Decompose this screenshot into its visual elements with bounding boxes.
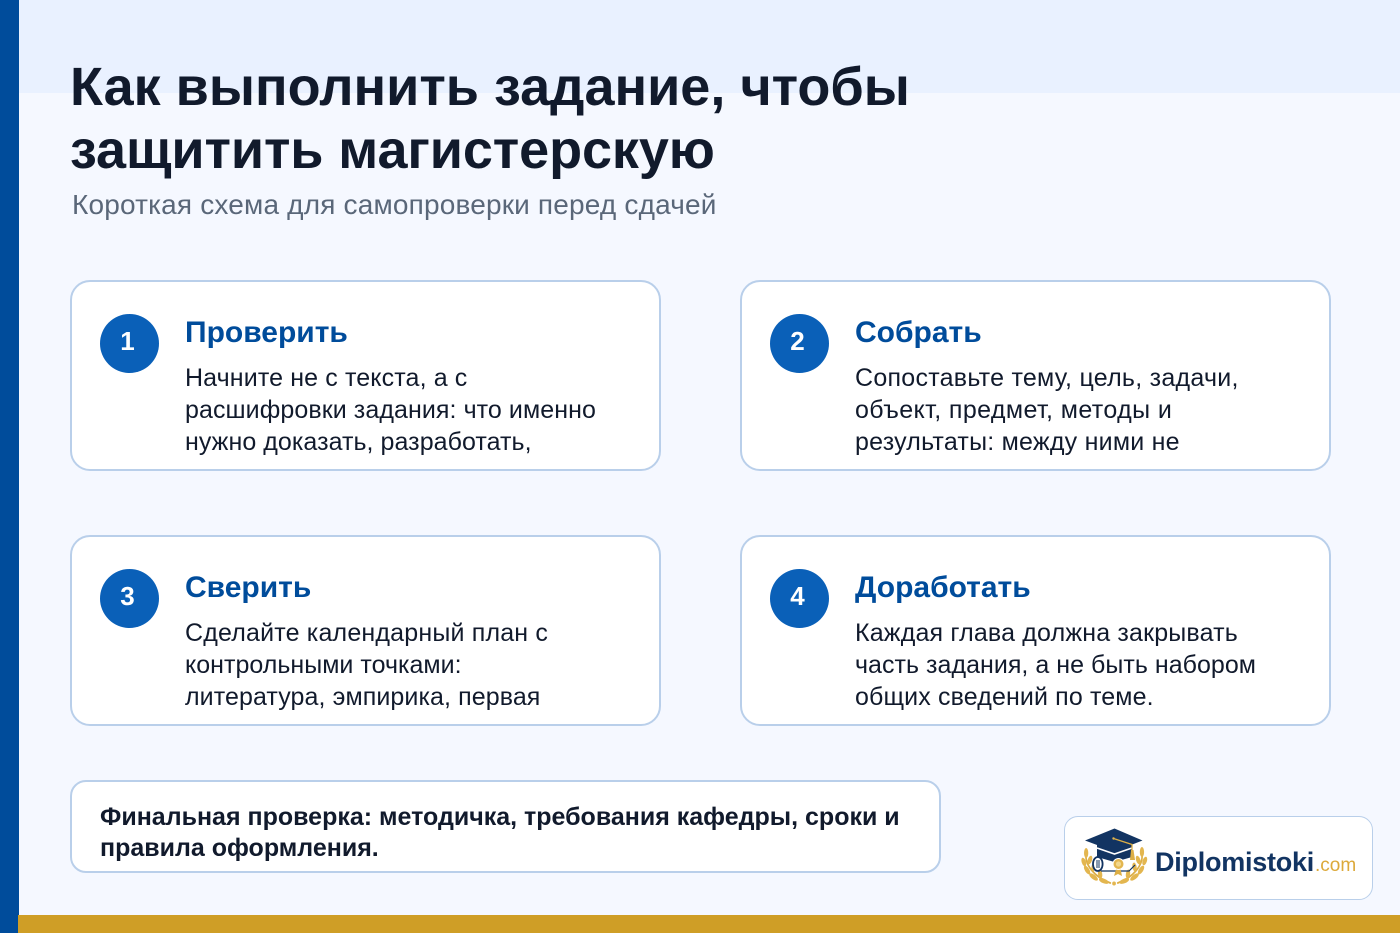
top header band [18, 0, 1400, 93]
panel: step 3 [70, 535, 661, 726]
icon: graduation cap with wreath and diploma [1081, 828, 1148, 886]
step 4 text: общих сведений по теме. [855, 683, 1154, 711]
title: защитить магистерскую [70, 120, 715, 180]
step 3 number: 3 [120, 581, 135, 611]
step 1 heading: Проверить [185, 316, 348, 349]
step 3 text [185, 619, 548, 711]
callout: final check: Финальная проверка: методичка, требования кафедры, сроки и [100, 803, 900, 831]
step 2 text: объект, предмет, методы и [855, 396, 1172, 424]
panel: step 4 [740, 535, 1331, 726]
logo wordmark: Diplomistoki.com [1155, 847, 1356, 877]
bottom accent bar [18, 915, 1400, 933]
step 1 text [185, 364, 596, 456]
title [70, 57, 910, 180]
step 2 text: результаты: между ними не [855, 428, 1180, 456]
panel: step 2 [740, 280, 1331, 471]
step 2 number [770, 314, 829, 373]
subtitle: Короткая схема для самопроверки перед сдачей [72, 189, 717, 220]
step 1 text: Начните не с текста, а с [185, 364, 467, 392]
title: Как выполнить задание, чтобы [70, 57, 910, 117]
step 3 number [100, 569, 159, 628]
diploma [1101, 865, 1135, 871]
step 2 number: 2 [790, 326, 805, 356]
panel: step 1 [70, 280, 661, 471]
step 1 text: расшифровки задания: что именно [185, 396, 596, 424]
step 4 text: часть задания, а не быть набором [855, 651, 1256, 679]
callout: final check [70, 780, 941, 873]
tassel [1114, 838, 1132, 851]
step 3 heading: Сверить [185, 571, 311, 604]
step 1 text: нужно доказать, разработать, [185, 428, 532, 456]
logo card [1064, 816, 1373, 900]
callout: final check: правила оформления. [100, 834, 379, 862]
step 4 text [855, 619, 1256, 711]
left accent bar [0, 0, 19, 933]
step 4 number [770, 569, 829, 628]
step 4 text: Каждая глава должна закрывать [855, 619, 1238, 647]
step 4 number: 4 [790, 581, 805, 611]
step 3 text: контрольными точками: [185, 651, 462, 679]
step 3 text: литература, эмпирика, первая [185, 683, 540, 711]
step 1 number [100, 314, 159, 373]
cap base [1097, 845, 1132, 862]
mortarboard [1085, 828, 1142, 852]
step 2 text: Сопоставьте тему, цель, задачи, [855, 364, 1239, 392]
step 3 text: Сделайте календарный план с [185, 619, 548, 647]
step 2 text [855, 364, 1239, 456]
step 2 heading: Собрать [855, 316, 982, 349]
step 1 number: 1 [120, 326, 135, 356]
step 4 heading: Доработать [855, 571, 1031, 604]
